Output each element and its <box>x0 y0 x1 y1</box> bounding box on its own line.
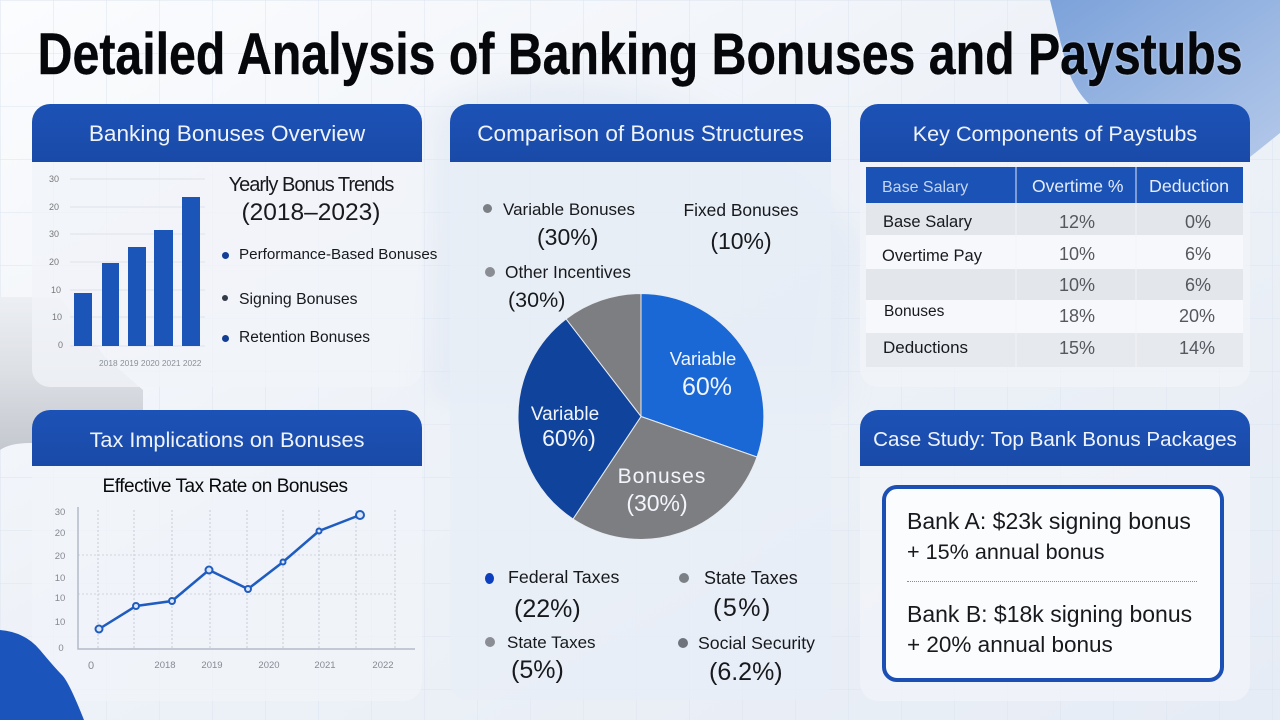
table: paystub components: Base Salary <box>883 213 973 231</box>
list: bonus types <box>222 246 437 346</box>
table: paystub components <box>866 167 1243 367</box>
divider dots <box>907 581 1197 582</box>
line chart: effective tax rate <box>55 507 415 672</box>
heading: overview: Banking Bonuses Overview <box>89 121 365 146</box>
table: paystub components: Bonuses <box>884 303 945 320</box>
heading: case study <box>860 410 1250 466</box>
list: bonus types: Performance-Based Bonuses <box>239 246 437 263</box>
legend: fixed bonuses: Fixed Bonuses <box>683 200 799 220</box>
legend: social security <box>678 633 815 686</box>
heading: paystubs <box>860 104 1250 162</box>
line chart: effective tax rate: 2018 <box>154 660 176 671</box>
panel: key components of paystubs <box>860 104 1250 387</box>
legend: state taxes: (5%) <box>713 594 772 622</box>
callout: bank comparison <box>882 485 1224 682</box>
legend: federal taxes: Federal Taxes <box>508 567 619 587</box>
panel: tax implications on bonuses <box>32 410 422 701</box>
table: paystub components: 6% <box>1185 275 1211 295</box>
pie chart: Bonuses <box>618 465 706 488</box>
bar chart: yearly bonus trends: 10 <box>51 285 61 295</box>
line chart: effective tax rate: 30 <box>55 507 65 518</box>
table: paystub components: Overtime Pay <box>882 247 983 265</box>
bar chart: yearly bonus trends: 30 <box>49 174 59 184</box>
pie chart: Variable <box>670 348 736 369</box>
table: paystub components: 20% <box>1179 306 1215 326</box>
table: paystub components: Deductions <box>883 338 968 357</box>
legend: other incentives <box>485 262 631 312</box>
panel: banking bonuses overview <box>32 104 422 387</box>
legend: federal taxes: (22%) <box>514 595 581 623</box>
heading: comparison: Comparison of Bonus Structures <box>477 121 804 146</box>
chart heading: yearly bonus trends: Yearly Bonus Trends <box>229 174 393 196</box>
heading: tax implications: Tax Implications on Bonuses <box>90 427 364 452</box>
bar chart: yearly bonus trends: 0 <box>58 340 63 350</box>
legend: other incentives: (30%) <box>508 288 565 312</box>
legend: state taxes 2 <box>485 633 596 684</box>
heading: paystubs: Key Components of Paystubs <box>913 121 1197 146</box>
line chart: effective tax rate: 0 <box>88 660 94 672</box>
heading: overview <box>32 104 422 162</box>
line chart: effective tax rate: 2021 <box>314 660 336 671</box>
pie chart <box>518 294 764 539</box>
bar chart: yearly bonus trends: 30 <box>49 229 59 239</box>
legend: social security: Social Security <box>698 633 815 653</box>
line chart: effective tax rate: 2022 <box>372 660 394 671</box>
table: paystub components: 12% <box>1059 212 1095 232</box>
legend: state taxes 2: State Taxes <box>507 633 596 652</box>
text: bank b: Bank B: $18k signing bonus <box>907 601 1192 627</box>
table: paystub components: Deduction <box>1149 176 1229 196</box>
heading: comparison <box>450 104 831 162</box>
table: paystub components: 10% <box>1059 244 1095 264</box>
panel: case study <box>860 410 1250 701</box>
table: paystub components: 0% <box>1185 212 1211 232</box>
table: paystub components: 6% <box>1185 244 1211 264</box>
pie chart: 60% <box>682 373 732 401</box>
bar chart: yearly bonus trends: 2018 2019 2020 2021 2022 <box>99 358 202 368</box>
table: paystub components: Overtime % <box>1032 176 1123 196</box>
bar chart: yearly bonus trends <box>49 174 205 368</box>
text: bank a: + 15% annual bonus <box>907 539 1105 564</box>
pie chart: Variable <box>531 404 599 425</box>
panel: comparison of bonus structures <box>450 104 831 700</box>
line chart: effective tax rate: 10 <box>55 573 65 584</box>
legend: fixed bonuses <box>683 200 799 254</box>
legend: variable bonuses: (30%) <box>537 224 598 250</box>
text: bank a: Bank A: $23k signing bonus <box>907 508 1191 534</box>
legend: state taxes <box>679 568 798 622</box>
text: bank b <box>907 601 1192 657</box>
chart heading: effective tax rate: Effective Tax Rate on Bonuses <box>102 476 348 497</box>
table: paystub components: Base Salary <box>882 179 968 196</box>
bar chart: yearly bonus trends: 10 <box>52 312 62 322</box>
line chart: effective tax rate: 2019 <box>201 660 223 671</box>
line chart: effective tax rate: 0 <box>58 643 64 654</box>
legend: variable bonuses: Variable Bonuses <box>503 200 635 219</box>
pie chart: (30%) <box>626 490 688 516</box>
text: bank a <box>907 508 1191 564</box>
legend: federal taxes <box>485 567 619 623</box>
table: paystub components: 18% <box>1059 306 1095 326</box>
legend: social security: (6.2%) <box>709 658 783 686</box>
line chart: effective tax rate: 10 <box>55 617 65 628</box>
table: paystub components: 10% <box>1059 275 1095 295</box>
table: paystub components: 15% <box>1059 338 1095 358</box>
decorative blob: bottom left corner <box>0 630 84 720</box>
line chart: effective tax rate: 20 <box>55 528 65 539</box>
legend: other incentives: Other Incentives <box>505 262 631 282</box>
title: Detailed Analysis of Banking Bonuses and Paystubs <box>38 22 1243 87</box>
heading: case study: Case Study: Top Bank Bonus Packages <box>873 428 1237 451</box>
line chart: effective tax rate: 2020 <box>258 660 280 671</box>
chart heading: yearly bonus trends <box>229 174 394 226</box>
legend: state taxes: State Taxes <box>704 568 798 588</box>
legend: state taxes 2: (5%) <box>511 656 564 684</box>
pie chart: 60%) <box>542 425 596 451</box>
heading: tax implications <box>32 410 422 466</box>
line chart: effective tax rate: 10 <box>55 593 65 604</box>
bar chart: yearly bonus trends: 20 <box>49 202 59 212</box>
list: bonus types: Signing Bonuses <box>239 291 358 308</box>
list: bonus types: Retention Bonuses <box>239 329 370 346</box>
table: paystub components: 14% <box>1179 338 1215 358</box>
chart heading: yearly bonus trends: (2018–2023) <box>242 199 380 226</box>
legend: fixed bonuses: (10%) <box>710 228 772 254</box>
text: bank b: + 20% annual bonus <box>907 632 1113 657</box>
bar chart: yearly bonus trends: 20 <box>49 257 59 267</box>
legend: variable bonuses <box>483 200 635 250</box>
line chart: effective tax rate: 20 <box>55 551 65 562</box>
